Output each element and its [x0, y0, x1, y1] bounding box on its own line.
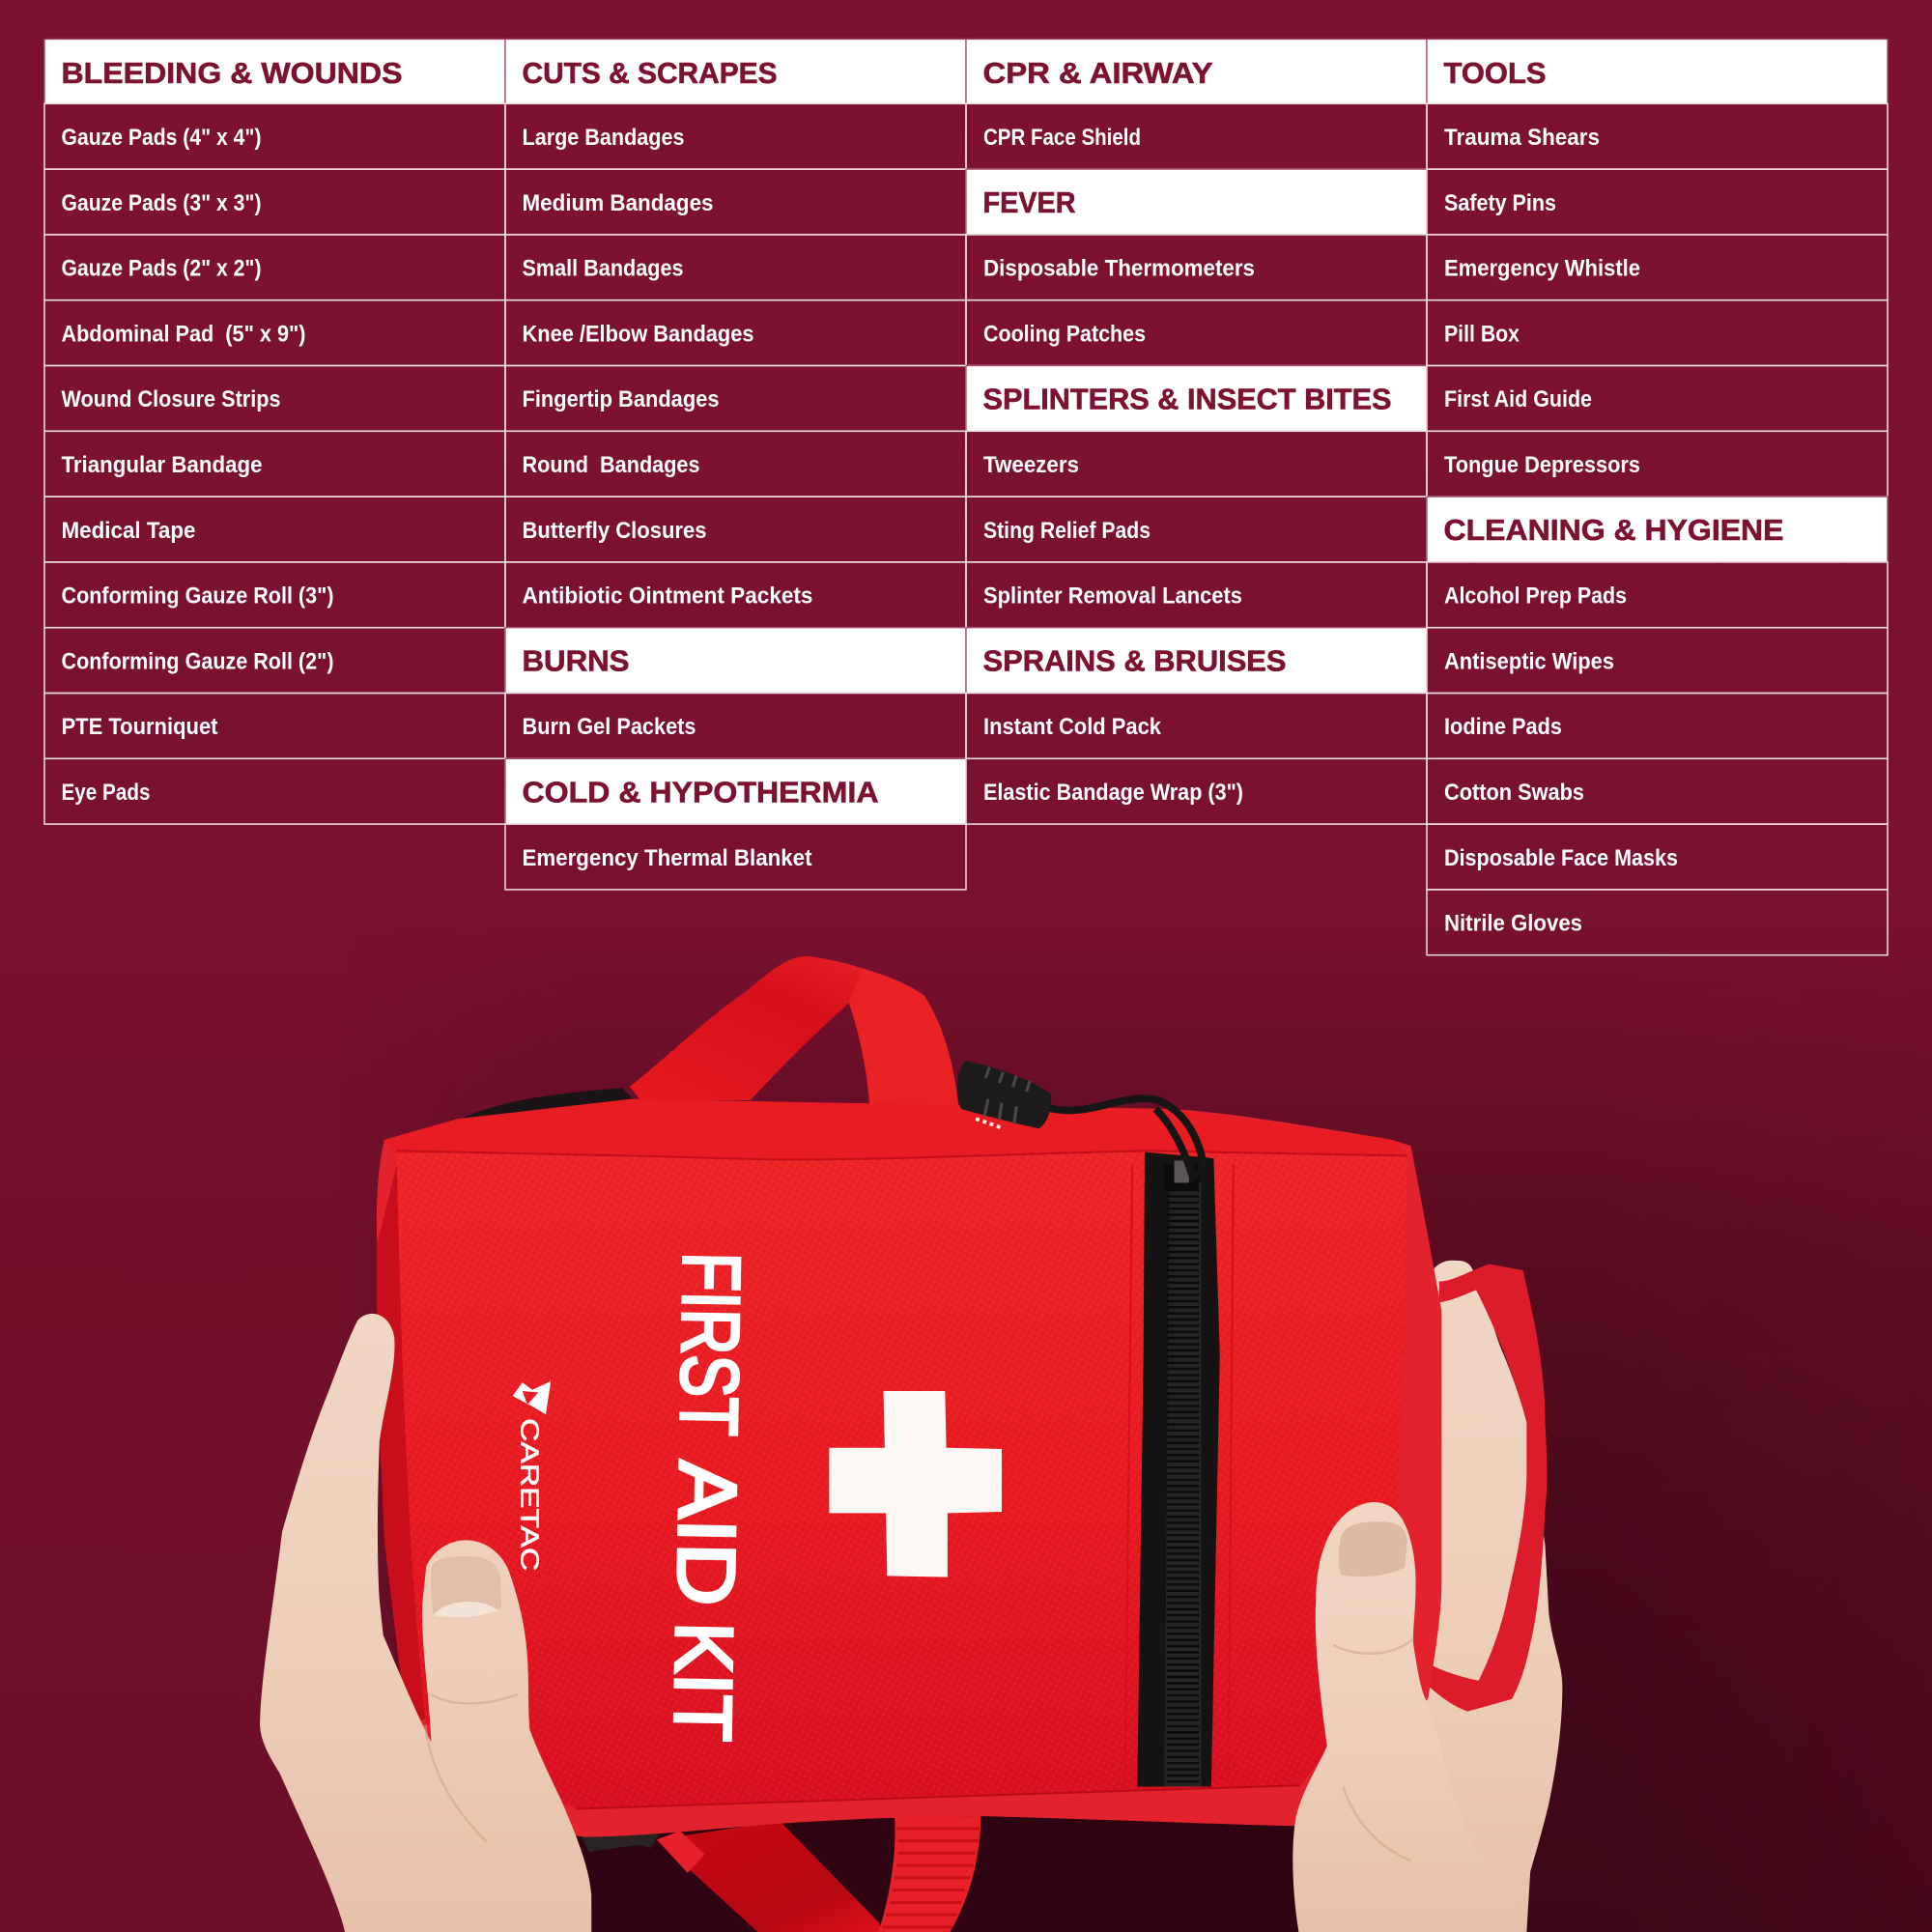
shadow beneath the kit: [570, 1739, 1362, 1932]
white cross logo: [829, 1391, 1002, 1577]
heading: cpr and airway: CPR & AIRWAY: [983, 56, 1213, 90]
item list: sprains and bruises: Instant Cold Pack: [983, 714, 1162, 740]
item list: tools: Emergency Whistle: [1444, 256, 1640, 282]
bag title: AID: [660, 1460, 753, 1606]
item: emergency thermal blanket: [505, 824, 966, 890]
heading: cpr and airway: [966, 39, 1427, 103]
item: cpr face shield: CPR Face Shield: [983, 125, 1141, 151]
heading: fever: FEVER: [983, 185, 1076, 219]
panel: bleeding and wounds column: [44, 39, 505, 824]
item list: bleeding and wounds: Wound Closure Strips: [62, 386, 280, 412]
heading: fever: [966, 169, 1427, 235]
item list: tools: First Aid Guide: [1444, 386, 1592, 412]
heading: cuts and scrapes: [505, 39, 966, 103]
panel: airway, fever, splinters and sprains column: [966, 39, 1427, 824]
item list: cleaning and hygiene: [1427, 562, 1888, 955]
item list: tools: Trauma Shears: [1444, 125, 1600, 151]
item list: fever: Disposable Thermometers: [983, 256, 1255, 282]
bag title: [657, 1252, 757, 1743]
item list: cleaning and hygiene: Disposable Face Masks: [1444, 845, 1678, 871]
item list: cleaning and hygiene: Alcohol Prep Pads: [1444, 583, 1627, 610]
left hand: [260, 1314, 591, 1932]
front panel: [397, 1151, 1407, 1808]
item list: bleeding and wounds: Abdominal Pad (5" x 9"): [62, 321, 305, 347]
item list: bleeding and wounds: Eye Pads: [62, 780, 151, 806]
item list: tools: [1427, 103, 1888, 497]
item list: bleeding and wounds: Gauze Pads (2" x 2"): [62, 256, 261, 282]
right hand fingers behind the bag: [1298, 1261, 1562, 1932]
heading: cleaning and hygiene: [1427, 497, 1888, 562]
item list: cuts and scrapes: Fingertip Bandages: [522, 386, 719, 412]
brand name: CARETAC: [516, 1418, 543, 1571]
item list: cleaning and hygiene: Cotton Swabs: [1444, 780, 1584, 806]
item list: cuts and scrapes: Large Bandages: [522, 125, 684, 151]
item list: tools: Pill Box: [1444, 321, 1520, 347]
item list: bleeding and wounds: PTE Tourniquet: [62, 714, 218, 740]
item list: cuts and scrapes: [505, 103, 966, 628]
side strap loop: [1430, 1264, 1547, 1712]
item: burn gel packets: [505, 694, 966, 758]
item: emergency thermal blanket: Emergency Thermal Blanket: [522, 845, 812, 871]
item list: bleeding and wounds: Conforming Gauze Roll (3"): [62, 583, 334, 610]
left thumb nail: [431, 1556, 501, 1617]
item: burn gel packets: Burn Gel Packets: [522, 714, 696, 740]
zipper cord and toggle: [957, 1061, 1204, 1177]
item list: bleeding and wounds: Conforming Gauze Roll (2"): [62, 648, 334, 674]
panel: tools and hygiene column: [1427, 39, 1888, 955]
item list: fever: [966, 235, 1427, 365]
heading: sprains and bruises: SPRAINS & BRUISES: [983, 644, 1287, 678]
item list: cuts and scrapes: Butterfly Closures: [522, 518, 707, 544]
zipper: [1137, 1152, 1220, 1786]
bottom straps: [582, 1816, 980, 1932]
top zipper edge: [456, 1088, 635, 1122]
item list: cleaning and hygiene: Nitrile Gloves: [1444, 911, 1582, 937]
item list: fever: Cooling Patches: [983, 321, 1146, 347]
heading: splinters and insect bites: SPLINTERS & INSECT BITES: [983, 383, 1391, 415]
right thumb crease: [1333, 1638, 1413, 1861]
item list: splinters and insect bites: Sting Relief Pads: [983, 518, 1151, 544]
bag title: KIT: [657, 1621, 750, 1743]
heading: tools: TOOLS: [1443, 56, 1546, 90]
top flap shading: [384, 1099, 1407, 1159]
bag title: FIRST: [664, 1252, 757, 1436]
top carry handle: [630, 956, 958, 1109]
heading: cold and hypothermia: [505, 758, 966, 824]
panel: cuts, burns and cold column: [505, 39, 966, 890]
background darkening toward bottom right: [383, 1027, 1932, 1932]
heading: tools: [1427, 39, 1888, 103]
item list: cleaning and hygiene: Antiseptic Wipes: [1444, 648, 1614, 674]
heading: bleeding and wounds: BLEEDING & WOUNDS: [62, 56, 402, 90]
left hand crease: [425, 1694, 518, 1842]
item list: cuts and scrapes: Antibiotic Ointment Packets: [522, 583, 813, 610]
item list: bleeding and wounds: Gauze Pads (3" x 3"): [62, 190, 261, 216]
right thumb nail: [1339, 1521, 1407, 1577]
kit body: [377, 1099, 1441, 1837]
item list: bleeding and wounds: Gauze Pads (4" x 4"): [62, 125, 261, 151]
bottom seam: [577, 1785, 1300, 1808]
heading: cleaning and hygiene: CLEANING & HYGIENE: [1443, 513, 1783, 547]
right thumb: [1293, 1502, 1526, 1932]
item list: sprains and bruises: Elastic Bandage Wrap (3"): [983, 780, 1243, 806]
item list: sprains and bruises: [966, 694, 1427, 824]
item list: cuts and scrapes: Round Bandages: [522, 452, 699, 478]
left side panel shade: [377, 1164, 425, 1725]
heading: splinters and insect bites: [966, 365, 1427, 431]
heading: burns: [505, 628, 966, 694]
heading: bleeding and wounds: [44, 39, 505, 103]
heading: cold and hypothermia: COLD & HYPOTHERMIA: [522, 775, 879, 809]
item list: cuts and scrapes: Knee /Elbow Bandages: [522, 321, 753, 347]
brand logo mark: [513, 1381, 551, 1414]
item list: cleaning and hygiene: Iodine Pads: [1444, 714, 1562, 740]
item list: splinters and insect bites: Splinter Removal Lancets: [983, 583, 1242, 610]
item list: bleeding and wounds: Medical Tape: [62, 518, 195, 544]
stitch lines: [1125, 1164, 1234, 1786]
heading: cuts and scrapes: CUTS & SCRAPES: [522, 56, 777, 90]
item list: splinters and insect bites: Tweezers: [983, 452, 1079, 478]
item list: tools: Tongue Depressors: [1444, 452, 1640, 478]
top seam: [397, 1151, 1407, 1159]
item list: tools: Safety Pins: [1444, 190, 1556, 216]
fabric texture: [397, 1151, 1407, 1808]
item: cpr face shield: [966, 103, 1427, 169]
item list: splinters and insect bites: [966, 431, 1427, 628]
item list: cuts and scrapes: Small Bandages: [522, 256, 684, 282]
heading: burns: BURNS: [522, 644, 630, 678]
item list: bleeding and wounds: Triangular Bandage: [62, 452, 263, 478]
item list: cuts and scrapes: Medium Bandages: [522, 190, 713, 216]
item list: bleeding and wounds: [44, 103, 505, 824]
heading: sprains and bruises: [966, 628, 1427, 694]
illustration: hands holding first aid kit: [260, 956, 1562, 1932]
